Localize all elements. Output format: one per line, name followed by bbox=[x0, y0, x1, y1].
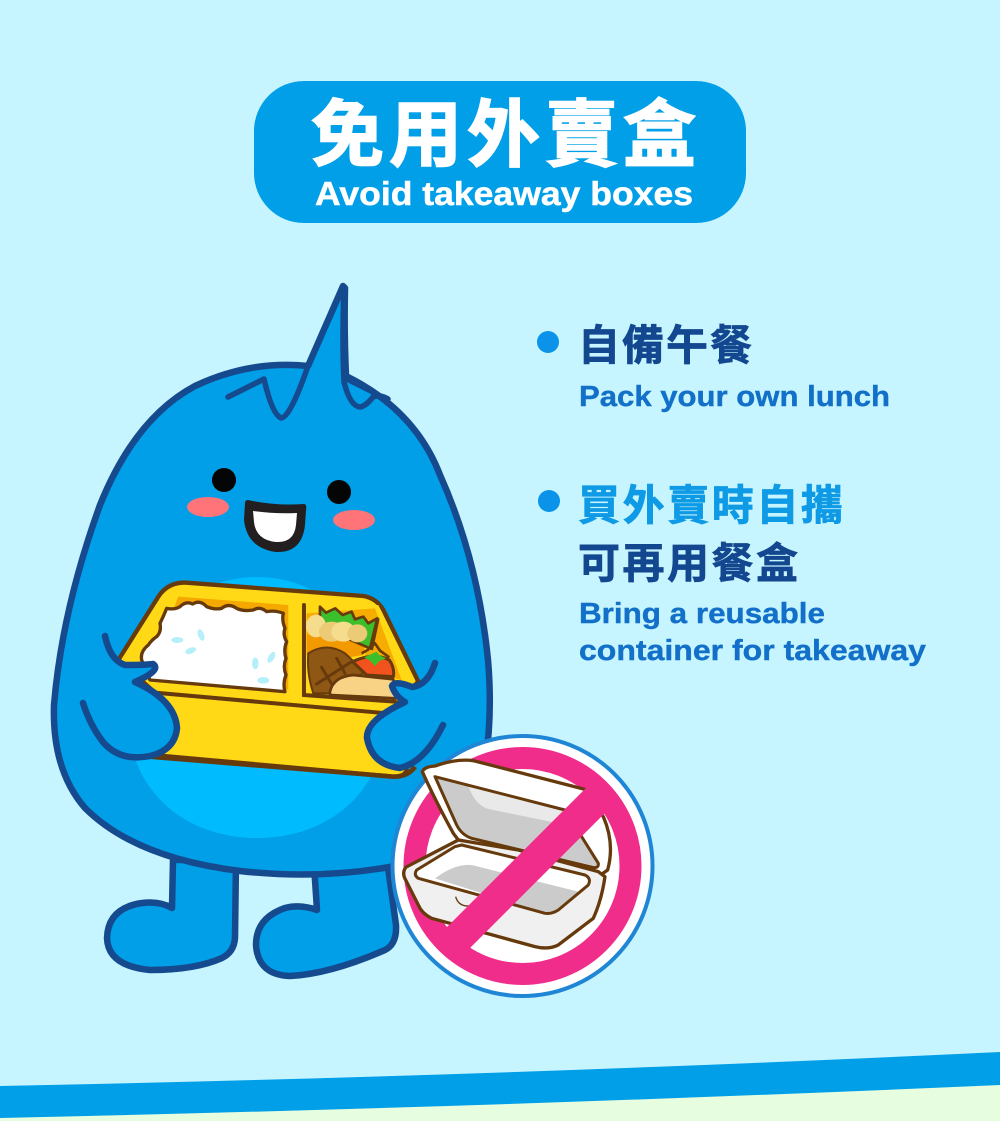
bullet 1 dot bbox=[537, 331, 559, 353]
fried egg roll bbox=[330, 675, 397, 698]
title: Chinese: 免用外賣盒 bbox=[311, 95, 696, 176]
mascot bbox=[54, 286, 490, 976]
mascot left hand bbox=[82, 636, 177, 756]
lunch box shell bbox=[118, 583, 418, 777]
bottom band bbox=[0, 1052, 1000, 1121]
mascot right hand bbox=[367, 650, 470, 768]
bullet 2 heading line 2: 可再用餐盒 bbox=[578, 540, 798, 587]
meat patty bbox=[308, 647, 363, 693]
sign slash bbox=[441, 777, 615, 954]
foam box bbox=[404, 760, 610, 948]
mascot hair lines bbox=[228, 288, 388, 418]
compartment dividers bbox=[304, 605, 395, 702]
lettuce bbox=[320, 607, 377, 648]
lunch box bbox=[118, 583, 418, 777]
bullet list bbox=[537, 322, 926, 667]
foam box lid bbox=[422, 760, 610, 877]
bullet 2 dot bbox=[538, 490, 560, 512]
bullet 1 English: Pack your own lunch bbox=[579, 381, 890, 413]
rice grains bbox=[171, 628, 277, 684]
bullet 1 heading: 自備午餐 bbox=[578, 322, 752, 369]
mascot eyes bbox=[212, 468, 351, 504]
no takeaway box sign bbox=[392, 736, 652, 996]
rice shadow bbox=[167, 597, 288, 690]
bullet 2 heading line 1: 買外賣時自攜 bbox=[578, 482, 843, 529]
mascot left foot bbox=[107, 860, 236, 970]
title banner bbox=[254, 81, 746, 223]
mascot body bbox=[54, 286, 490, 875]
bullet 2 English line 2: container for takeaway bbox=[579, 635, 926, 667]
foam box base bbox=[404, 840, 605, 948]
mascot belly bbox=[128, 577, 386, 838]
mascot right foot bbox=[256, 860, 396, 976]
rice bbox=[141, 602, 287, 692]
sign disc bbox=[392, 736, 652, 996]
mascot cheeks bbox=[187, 497, 375, 530]
lunch box bottom edge bbox=[150, 757, 415, 777]
sign ring bbox=[414, 758, 630, 974]
bullet 2 English line 1: Bring a reusable bbox=[579, 598, 825, 630]
tomato bbox=[353, 656, 394, 677]
lunch box rim line bbox=[143, 692, 395, 714]
title: English: Avoid takeaway boxes bbox=[315, 175, 693, 212]
side dish compartment bbox=[304, 605, 415, 702]
mascot mouth bbox=[244, 500, 306, 552]
egg pieces bbox=[306, 615, 367, 642]
